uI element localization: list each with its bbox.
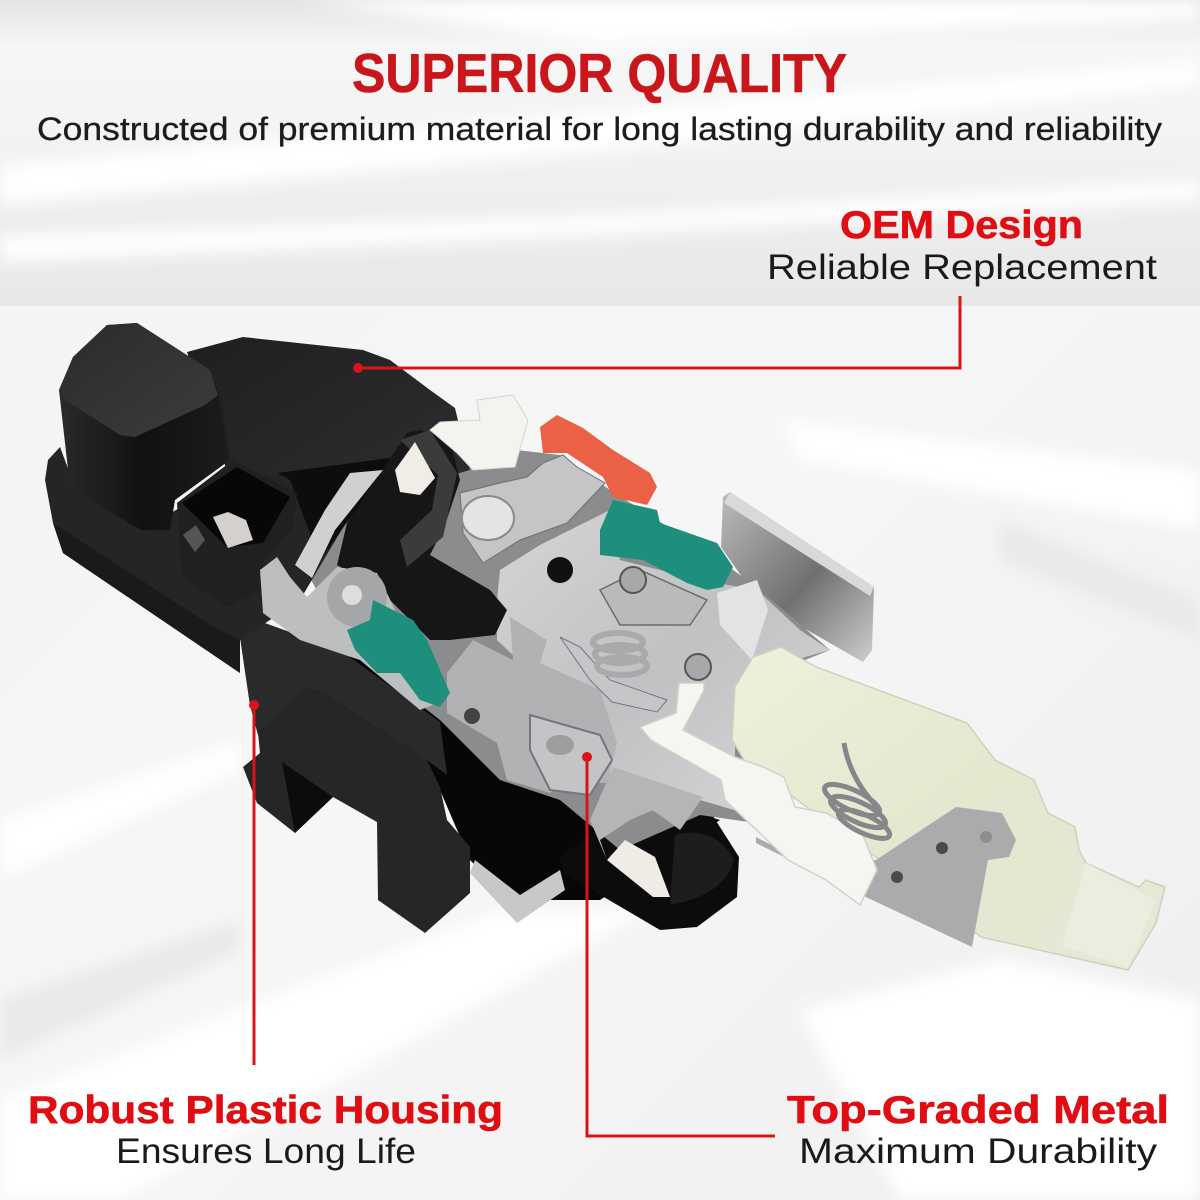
callout: Top-Graded Metal bbox=[582, 752, 1169, 1171]
thin silver plate bbox=[721, 492, 874, 662]
title: SUPERIOR QUALITY bbox=[352, 42, 847, 104]
actuator cap bbox=[59, 323, 230, 530]
callout: Robust Plastic Housing: Robust Plastic Housing bbox=[28, 1089, 503, 1132]
solenoid module bbox=[732, 647, 1165, 970]
connector bbox=[177, 460, 297, 607]
white clip upper bbox=[430, 395, 528, 470]
module spring bbox=[821, 743, 893, 844]
spring and flap bbox=[560, 633, 667, 712]
lever edge bbox=[400, 430, 457, 567]
white arm bbox=[640, 683, 877, 905]
screw and hole bbox=[547, 557, 711, 680]
silver bracket and rivet bbox=[460, 455, 605, 563]
foam block bbox=[243, 688, 470, 933]
callout: Top-Graded Metal: Maximum Durability bbox=[799, 1132, 1158, 1171]
silver arm bbox=[295, 470, 383, 578]
callout: OEM Design bbox=[353, 204, 1157, 373]
lower metal tab bbox=[590, 767, 703, 860]
green clip upper bbox=[600, 500, 733, 590]
callout: Robust Plastic Housing bbox=[28, 700, 503, 1171]
silver foot strip bbox=[470, 860, 565, 923]
black lever bbox=[337, 430, 507, 640]
green clip lower bbox=[347, 600, 450, 707]
callout: Top-Graded Metal: Top-Graded Metal bbox=[787, 1089, 1169, 1132]
upper black cover bbox=[187, 337, 470, 520]
callout: OEM Design: Reliable Replacement bbox=[767, 248, 1157, 287]
gloss lower lobe bbox=[560, 813, 739, 930]
callout: Robust Plastic Housing: Ensures Long Life bbox=[116, 1132, 416, 1171]
black under-body bbox=[240, 637, 720, 900]
white latch foot bbox=[607, 840, 670, 897]
red clip bbox=[540, 415, 657, 505]
callout: OEM Design: OEM Design bbox=[840, 204, 1083, 247]
central latch bbox=[447, 617, 617, 795]
subtitle: Constructed of premium material for long lasting durability and reliability bbox=[37, 111, 1162, 147]
metal underlay bbox=[300, 440, 830, 850]
product: door lock actuator bbox=[45, 323, 1165, 970]
cap top face bbox=[59, 323, 218, 437]
white clip small bbox=[395, 442, 435, 495]
lower black body bbox=[45, 447, 380, 673]
main metal plate bbox=[497, 510, 830, 820]
left latch plate bbox=[260, 557, 445, 710]
bracket bbox=[756, 807, 1016, 947]
